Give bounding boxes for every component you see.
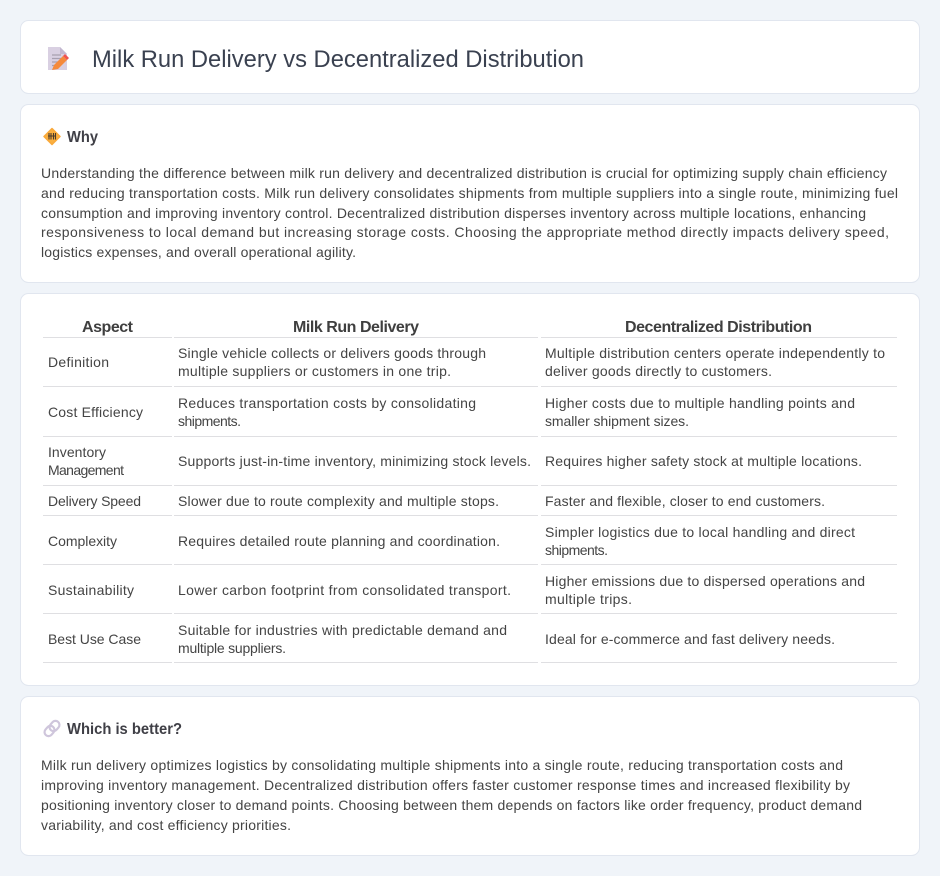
row: cost efficiency: smaller shipment sizes. — [545, 413, 689, 429]
row: best use case — [43, 622, 897, 663]
row: sustainability: Higher emissions due to dispersed operations and — [545, 573, 865, 589]
text block: which is better paragraph — [41, 757, 862, 833]
title: Milk Run Delivery vs Decentralized Distribution — [92, 46, 584, 73]
icon: warning diamond — [44, 128, 60, 144]
text block: why paragraph: logistics expenses, and overall operational agility. — [41, 244, 356, 260]
row: sustainability: multiple trips. — [545, 591, 632, 607]
row: sustainability — [43, 573, 897, 614]
text block: why paragraph: Understanding the difference between milk run delivery and decentralized distribution is crucial for optimizing supply chain efficiency — [41, 165, 887, 181]
row: best use case: multiple suppliers. — [178, 640, 286, 656]
row: cost efficiency: shipments. — [178, 413, 241, 429]
row: cost efficiency: Reduces transportation costs by consolidating — [178, 395, 476, 411]
icon: chain link — [43, 719, 61, 738]
row: best use case: Suitable for industries with predictable demand and — [178, 622, 507, 638]
text block: why paragraph: responsiveness to local demand but increasing storage costs. Choosing the appropriate method directly impacts delivery speed, — [41, 224, 889, 240]
text block: why paragraph — [41, 165, 898, 260]
table header — [43, 319, 897, 338]
panel: comparison table — [20, 294, 920, 686]
row: inventory management: Management — [48, 462, 124, 478]
text block: which is better paragraph: variability, and cost efficiency priorities. — [41, 817, 291, 833]
heading: which is better: Which is better? — [67, 721, 182, 738]
row: definition: Single vehicle collects or delivers goods through — [178, 345, 486, 361]
row: best use case: Best Use Case — [48, 631, 141, 647]
row: cost efficiency: Higher costs due to multiple handling points and — [545, 395, 855, 411]
row: sustainability: Sustainability — [48, 582, 134, 598]
heading: why: Why — [67, 129, 98, 146]
row: delivery speed: Delivery Speed — [48, 493, 141, 509]
text block: why paragraph: and reducing transportation costs. Milk run delivery consolidates shipments from multiple suppliers into a single route, minimizing fuel — [41, 185, 898, 201]
row: inventory management — [43, 444, 897, 486]
row: delivery speed — [43, 493, 897, 516]
icon: document with pencil — [48, 47, 69, 70]
panel: which is better — [20, 696, 920, 856]
row: complexity: Requires detailed route planning and coordination. — [178, 533, 500, 549]
row: delivery speed: Faster and flexible, closer to end customers. — [545, 493, 825, 509]
row: complexity: Simpler logistics due to local handling and direct — [545, 524, 855, 540]
row: cost efficiency — [43, 395, 897, 437]
text block: why paragraph: consumption and improving inventory control. Decentralized distribution disperses inventory across multiple locations, enhancing — [41, 205, 866, 221]
text block: which is better paragraph: Milk run delivery optimizes logistics by consolidating multiple shipments into a single route, reducing transportation costs and — [41, 757, 843, 773]
row: complexity: Complexity — [48, 533, 117, 549]
row: complexity: shipments. — [545, 542, 608, 558]
panel: why — [20, 104, 920, 282]
row: sustainability: Lower carbon footprint from consolidated transport. — [178, 582, 511, 598]
row: best use case: Ideal for e-commerce and fast delivery needs. — [545, 631, 835, 647]
text block: which is better paragraph: improving inventory management. Decentralized distribution offers faster customer response times and increased flexibility by — [41, 777, 850, 793]
row: definition — [43, 345, 897, 387]
table header: Milk Run Delivery — [293, 319, 419, 336]
row: inventory management: Supports just-in-time inventory, minimizing stock levels. — [178, 453, 531, 469]
panel: header — [20, 20, 920, 94]
row: inventory management: Requires higher safety stock at multiple locations. — [545, 453, 862, 469]
row: definition: multiple suppliers or customers in one trip. — [178, 363, 451, 379]
table header: Aspect — [82, 319, 134, 336]
row: inventory management: Inventory — [48, 444, 106, 460]
row: definition: Multiple distribution centers operate independently to — [545, 345, 885, 361]
row: definition: Definition — [48, 354, 109, 370]
row: complexity — [43, 524, 897, 565]
row: cost efficiency: Cost Efficiency — [48, 404, 143, 420]
row: definition: deliver goods directly to customers. — [545, 363, 772, 379]
row: delivery speed: Slower due to route complexity and multiple stops. — [178, 493, 499, 509]
text block: which is better paragraph: positioning inventory closer to demand points. Choosing between them depends on factors like order frequency, product demand — [41, 797, 862, 813]
table header: Decentralized Distribution — [625, 319, 812, 336]
